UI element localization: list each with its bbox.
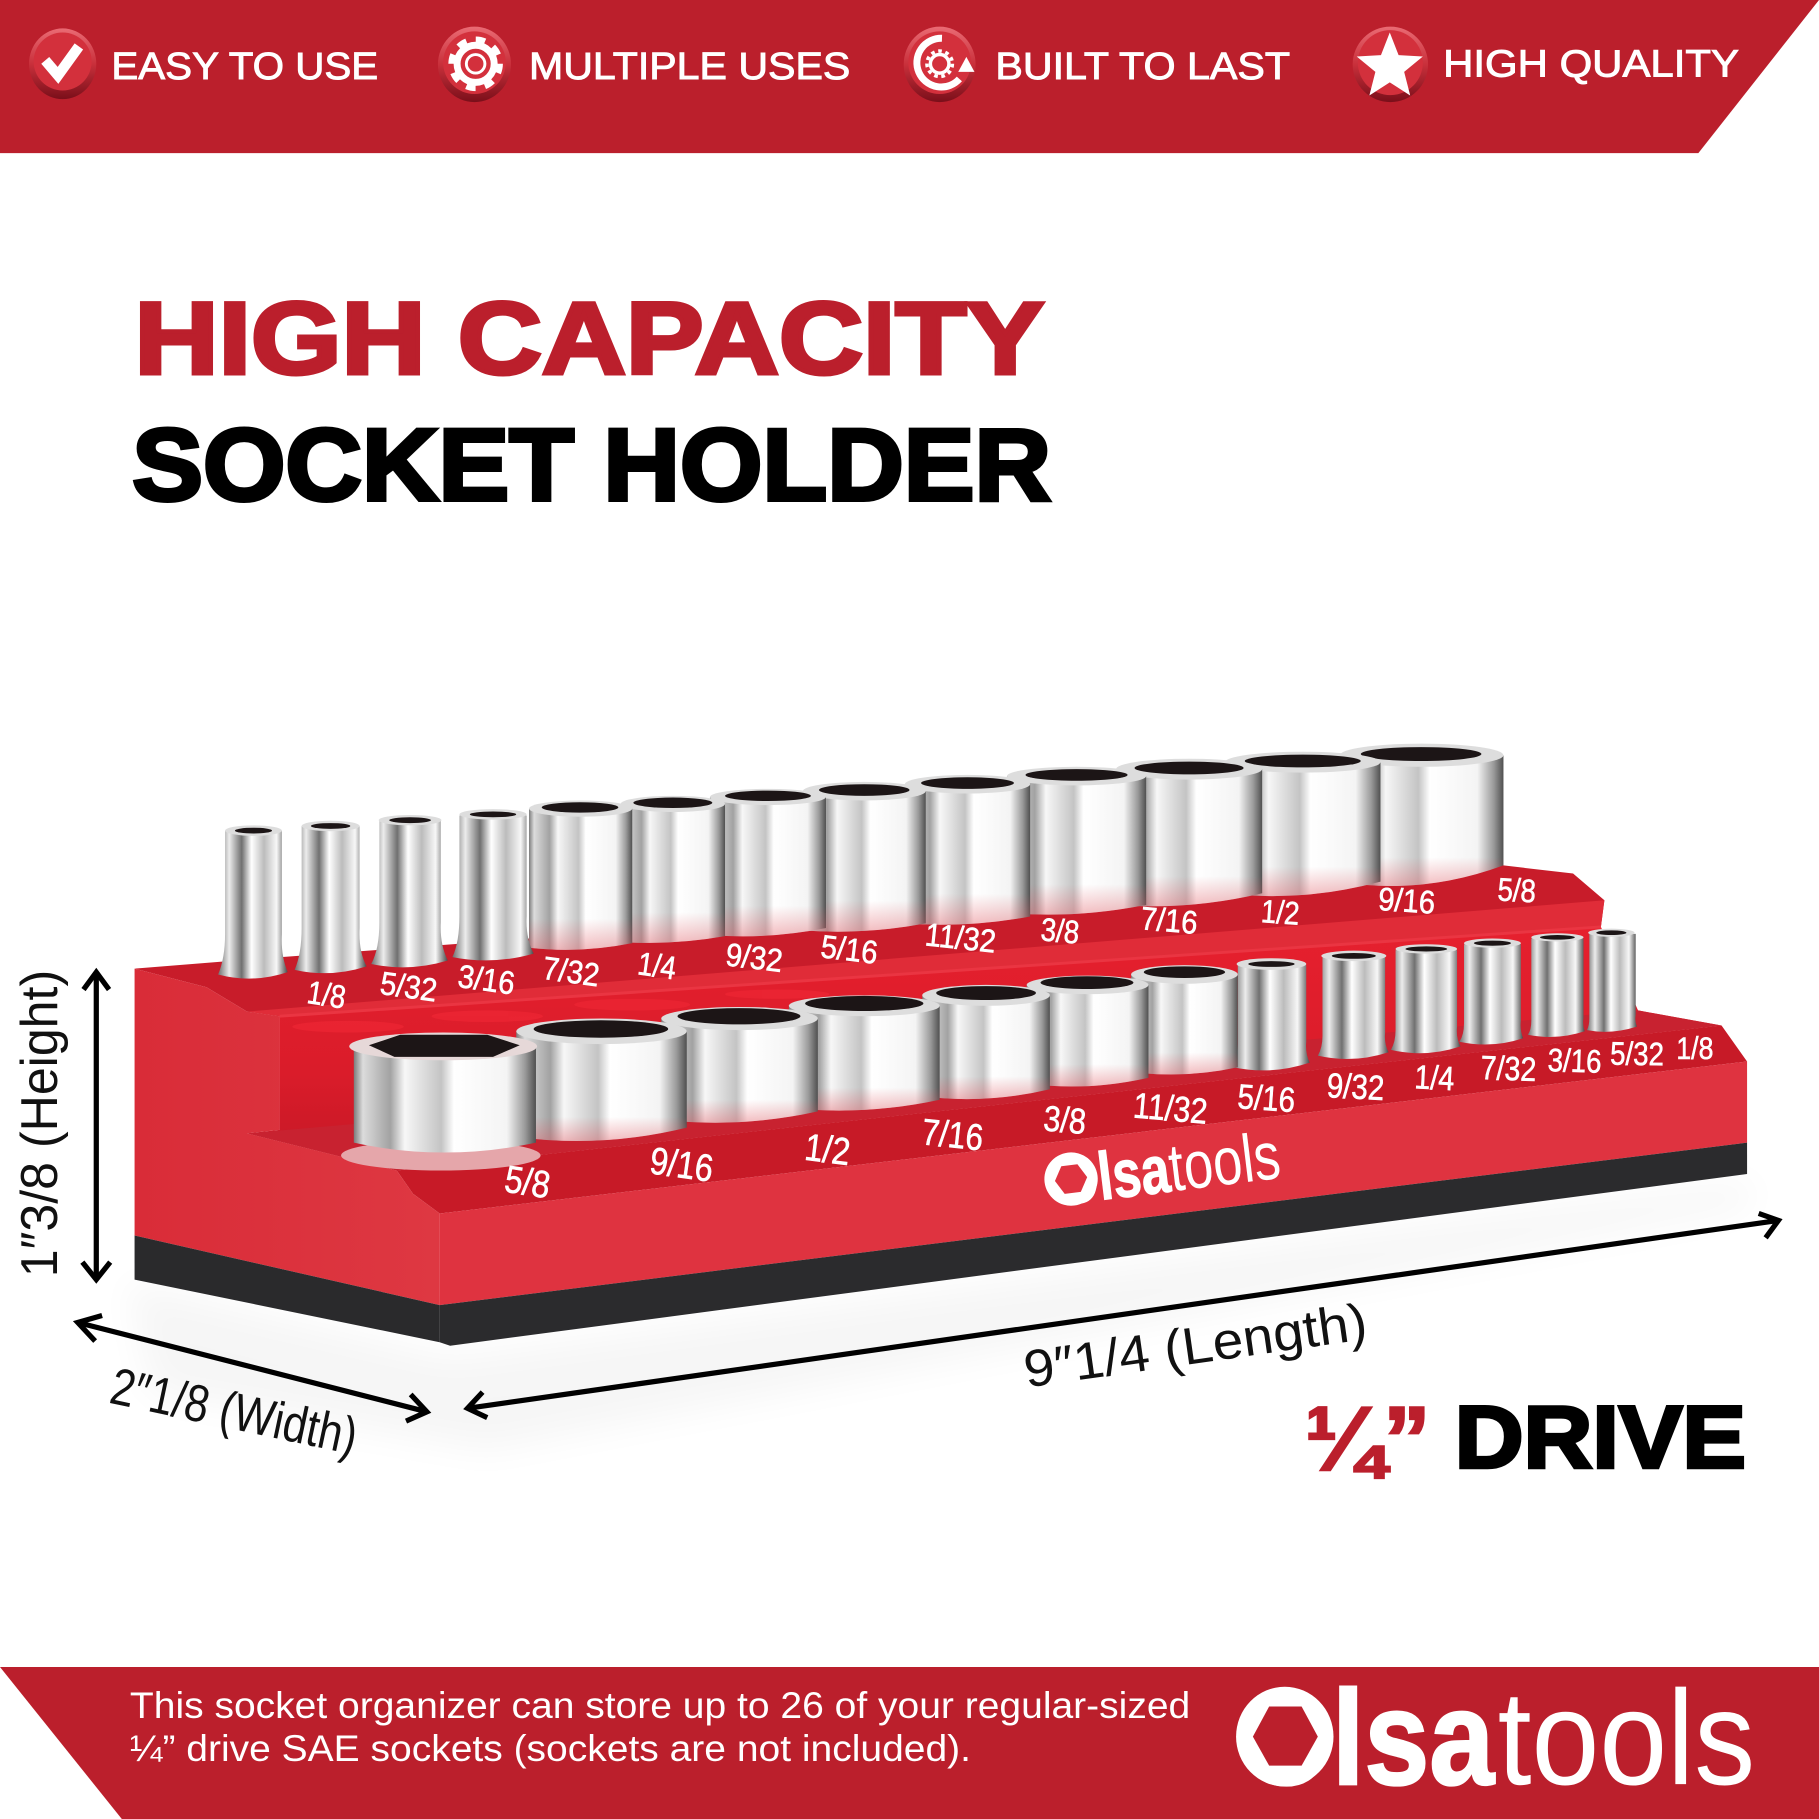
holder body: [135, 865, 1747, 1346]
socket 1/4 upper: [529, 800, 632, 950]
socket 3/16 lower: [1459, 939, 1523, 1045]
description text: [130, 1684, 1190, 1769]
holder logo: [1040, 1118, 1284, 1221]
size labels upper tier: 3/8: [1039, 912, 1081, 951]
size labels upper tier: 1/8: [305, 975, 348, 1016]
size labels lower tier: 1/8: [1676, 1032, 1713, 1067]
size labels lower tier: 9/16: [647, 1139, 716, 1190]
socket 7/32 upper: [452, 809, 534, 960]
description text: ¼” drive SAE sockets (sockets are not included).: [130, 1727, 971, 1769]
width dimension: [78, 1316, 427, 1466]
socket 11/32 upper: [803, 782, 926, 932]
height dimension: [11, 970, 110, 1280]
top banner: [0, 0, 1819, 153]
socket 11/32 lower: [1131, 965, 1238, 1075]
icon: refresh gear button: [904, 27, 976, 102]
socket 9/16 lower: [661, 1007, 818, 1123]
socket 1/8 lower: [1587, 929, 1637, 1032]
size labels upper tier: 3/16: [456, 958, 517, 1002]
socket 5/8 front: [341, 1032, 541, 1171]
upper row of sockets: [218, 744, 1503, 979]
heading line 1: HIGH CAPACITY: [135, 282, 1044, 396]
socket 3/16 upper: [371, 815, 448, 967]
brand logo: Olsa: [1241, 1662, 1495, 1813]
socket 5/8 upper: [1340, 744, 1503, 886]
drive word: DRIVE: [1455, 1387, 1746, 1486]
size labels upper tier: 11/32: [923, 916, 998, 960]
size labels lower tier: 5/8: [502, 1157, 553, 1207]
size labels upper tier: 7/16: [1139, 900, 1199, 941]
size labels lower tier: 9/32: [1326, 1066, 1385, 1108]
length arrow: [468, 1213, 1778, 1418]
size labels upper tier: 9/16: [1377, 880, 1436, 921]
label: high quality: HIGH QUALITY: [1443, 43, 1739, 86]
size labels upper tier: 1/2: [1260, 894, 1301, 932]
size labels lower tier: 11/32: [1132, 1086, 1209, 1132]
description text: This socket organizer can store up to 26 of your regular-sized: [130, 1684, 1190, 1726]
size labels lower tier: 3/16: [1547, 1043, 1602, 1080]
socket holder product: [135, 744, 1747, 1346]
height label: 1″3/8 (Height): [11, 970, 69, 1277]
size labels lower tier: 1/2: [802, 1125, 853, 1174]
socket 5/16 lower: [1233, 958, 1310, 1070]
socket 1/8 upper: [218, 825, 288, 979]
socket 5/8 second: [516, 1019, 687, 1141]
socket 9/32 lower: [1318, 951, 1389, 1059]
height arrow: [82, 972, 110, 1280]
socket 3/8 upper: [905, 775, 1030, 925]
drive size fraction: ¼”: [1305, 1389, 1430, 1490]
size labels lower tier: 5/16: [1236, 1077, 1297, 1120]
size labels lower tier: 5/32: [1610, 1036, 1664, 1073]
socket 7/16 upper: [1007, 767, 1146, 915]
socket 3/8 lower: [1027, 976, 1148, 1087]
lower row of sockets: [341, 929, 1637, 1171]
icon: star button: [1353, 27, 1428, 102]
size labels upper tier: 5/16: [819, 928, 880, 971]
size labels lower tier: 7/16: [920, 1112, 985, 1159]
icon: gear button: [438, 27, 511, 102]
socket 5/16 upper: [710, 789, 826, 936]
icon: check mark button: [29, 28, 96, 99]
heading line 2: SOCKET HOLDER: [132, 408, 1051, 522]
size labels upper tier: 9/32: [724, 936, 785, 979]
floor shadow: [128, 1181, 1752, 1450]
socket 5/32 lower: [1528, 933, 1585, 1037]
label: multiple uses: MULTIPLE USES: [529, 45, 850, 88]
label: easy to use: EASY TO USE: [111, 45, 378, 88]
size labels upper tier: [305, 872, 1537, 1016]
socket 7/16 lower: [922, 985, 1050, 1099]
drive size callout: [1305, 1387, 1746, 1490]
size labels upper tier: 5/8: [1497, 872, 1537, 910]
brand logo: tools: [1498, 1662, 1755, 1813]
socket 1/2 upper: [1116, 759, 1262, 906]
size labels lower tier: 7/32: [1480, 1049, 1537, 1089]
holder logo: Olsa: [1054, 1132, 1174, 1220]
socket 7/32 lower: [1391, 944, 1461, 1053]
length dimension: [468, 1213, 1778, 1418]
bottom banner: [0, 1662, 1819, 1819]
size labels lower tier: 1/4: [1414, 1058, 1455, 1098]
size labels upper tier: 5/32: [378, 965, 439, 1009]
width label: 2″1/8 (Width): [105, 1358, 363, 1466]
size labels lower tier: 3/8: [1042, 1099, 1088, 1143]
width arrow: [78, 1316, 427, 1421]
heading: [132, 282, 1051, 522]
socket 9/16 upper: [1225, 752, 1380, 896]
holder logo: tools: [1165, 1118, 1284, 1206]
size labels upper tier: 7/32: [540, 949, 602, 994]
socket 9/32 upper: [621, 796, 725, 943]
holder empty slot highlights: [292, 990, 829, 1032]
socket 5/32 upper: [295, 821, 367, 973]
length label: 9″1/4 (Length): [1020, 1293, 1371, 1399]
brand logo: [1236, 1662, 1755, 1813]
label: built to last: BUILT TO LAST: [995, 45, 1290, 88]
size labels upper tier: 1/4: [635, 946, 678, 987]
socket 1/2 lower: [789, 995, 940, 1111]
size labels lower tier: [502, 1032, 1713, 1207]
